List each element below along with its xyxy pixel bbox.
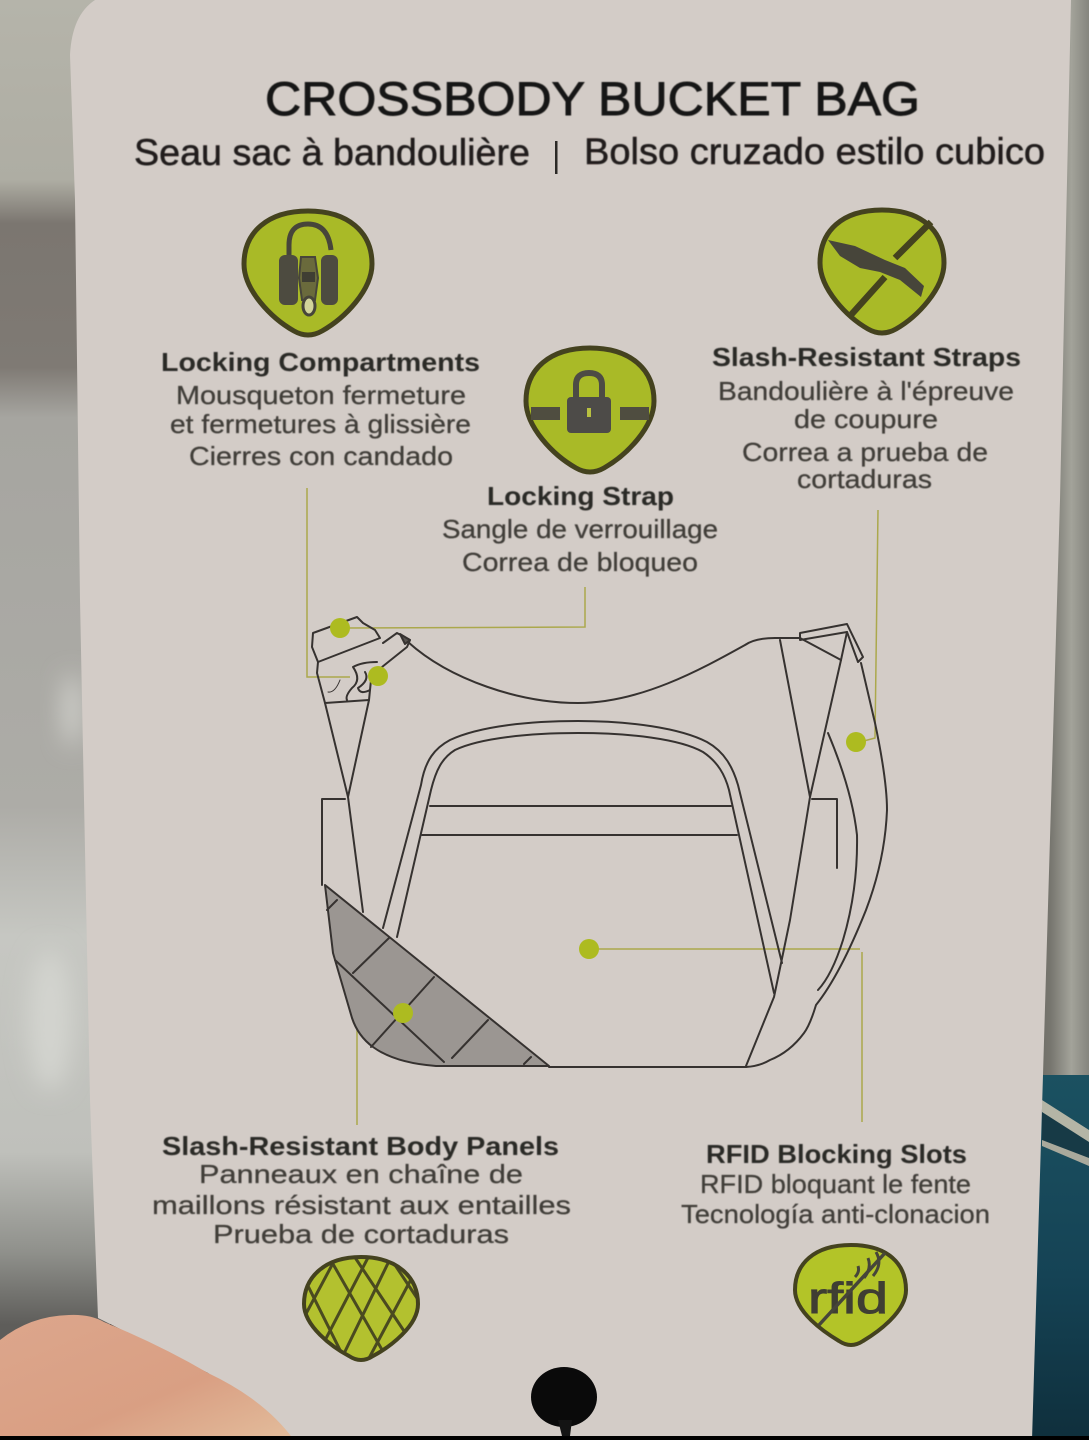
label: rfid blocking slots: RFID bloquant le fente [700,1169,971,1199]
quilted panel [325,885,549,1066]
label: slash-resistant straps: Correa a prueba de [742,437,988,467]
bottom line [549,1066,746,1068]
label: slash-resistant body panels: Panneaux en chaîne de [199,1159,523,1189]
title block [134,72,1045,173]
zipper arch outer [383,721,782,963]
label: locking compartments: Cierres con candado [189,441,453,471]
right body and strap [746,640,841,1066]
icon: rfid blocked: rfid [808,1274,888,1323]
icon: mesh panel [302,1255,420,1362]
label: locking strap: Correa de bloqueo [462,547,698,577]
label: slash-resistant straps [712,342,1021,494]
label: rfid blocking slots: RFID Blocking Slots [706,1139,967,1169]
teal bag in background [1020,1075,1089,1440]
thumb [0,1315,294,1440]
title: CROSSBODY BUCKET BAG [265,72,920,125]
label: slash-resistant body panels [152,1131,571,1249]
bottom black edge [0,1436,1089,1440]
leader lines [307,488,878,1125]
label: slash-resistant straps: de coupure [794,404,938,434]
label: slash-resistant body panels: maillons résistant aux entailles [152,1190,571,1220]
left pocket and side [322,799,345,885]
label: slash-resistant straps: Slash-Resistant Straps [712,342,1021,372]
top curve of body [408,638,775,703]
subtitle French: Seau sac à bandoulière [134,132,530,173]
pocket horizontals [430,805,731,807]
label: locking strap: Locking Strap [487,481,674,511]
label: locking compartments: et fermetures à glissière [170,409,471,439]
label: slash-resistant straps: cortaduras [797,464,932,494]
icon: locking strap [526,348,654,472]
buckle and clip [312,617,380,662]
icon: rfid blocked [795,1245,906,1345]
right pocket [812,799,837,868]
label: locking strap: Sangle de verrouillage [442,514,718,544]
label: rfid blocking slots: Tecnología anti-clonacion [681,1199,990,1229]
label: locking compartments: Locking Compartments [161,347,480,377]
label: slash-resistant body panels: Slash-Resistant Body Panels [162,1131,559,1161]
zipper arch inner [397,733,774,993]
icon: locking compartments [244,211,372,335]
subtitle divider [555,141,558,174]
icon: slash-resistant straps [820,210,944,333]
hang tag hole [531,1367,597,1436]
label: rfid blocking slots [681,1139,990,1229]
bag illustration [312,617,887,1067]
label: slash-resistant straps: Bandoulière à l'épreuve [718,376,1014,406]
callout dots [330,618,866,1023]
label: locking strap [442,481,718,577]
label: slash-resistant body panels: Prueba de cortaduras [213,1219,509,1249]
label: locking compartments: Mousqueton fermeture [176,380,466,410]
subtitle Spanish: Bolso cruzado estilo cubico [584,131,1045,172]
label: locking compartments [161,347,480,471]
